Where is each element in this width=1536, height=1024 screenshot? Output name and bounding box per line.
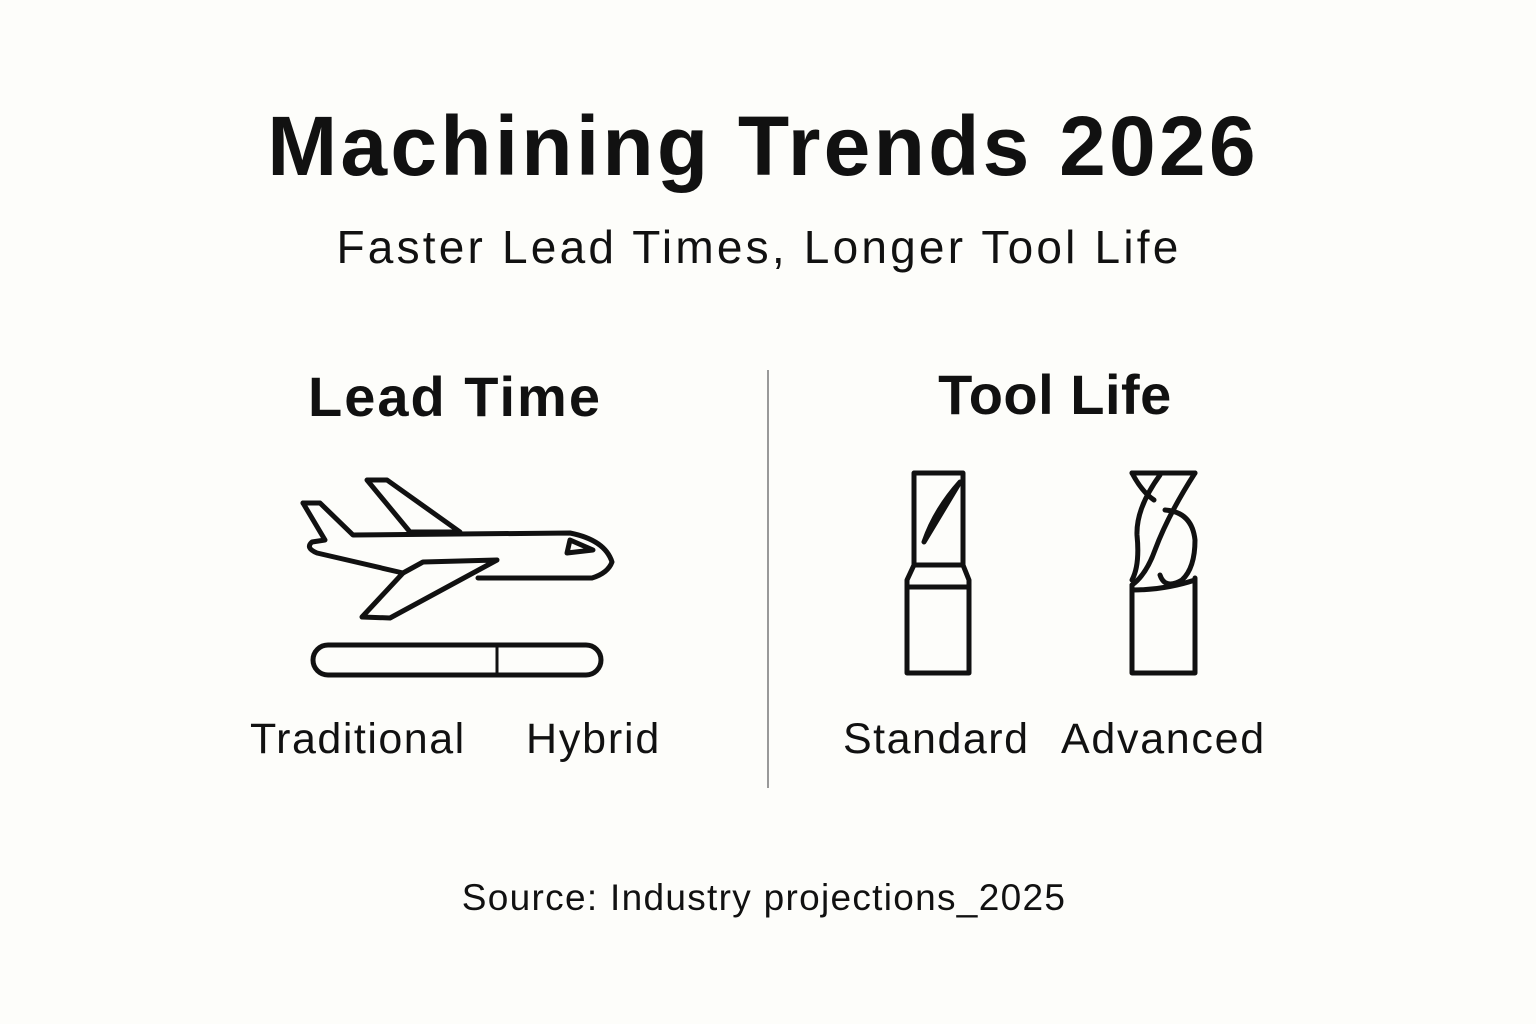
subtitle: Faster Lead Times, Longer Tool Life: [336, 221, 1182, 273]
divider: [767, 370, 768, 788]
title: Machining Trends 2026: [267, 99, 1259, 193]
heading: tool life: Tool Life: [938, 363, 1172, 426]
heading: lead time: Lead Time: [308, 365, 602, 428]
source note: Source: Industry projections_2025: [462, 877, 1066, 918]
label: standard: Standard: [843, 715, 1030, 763]
label: advanced: Advanced: [1061, 715, 1266, 763]
label: traditional: Traditional: [250, 715, 466, 763]
label: hybrid: Hybrid: [526, 715, 661, 763]
